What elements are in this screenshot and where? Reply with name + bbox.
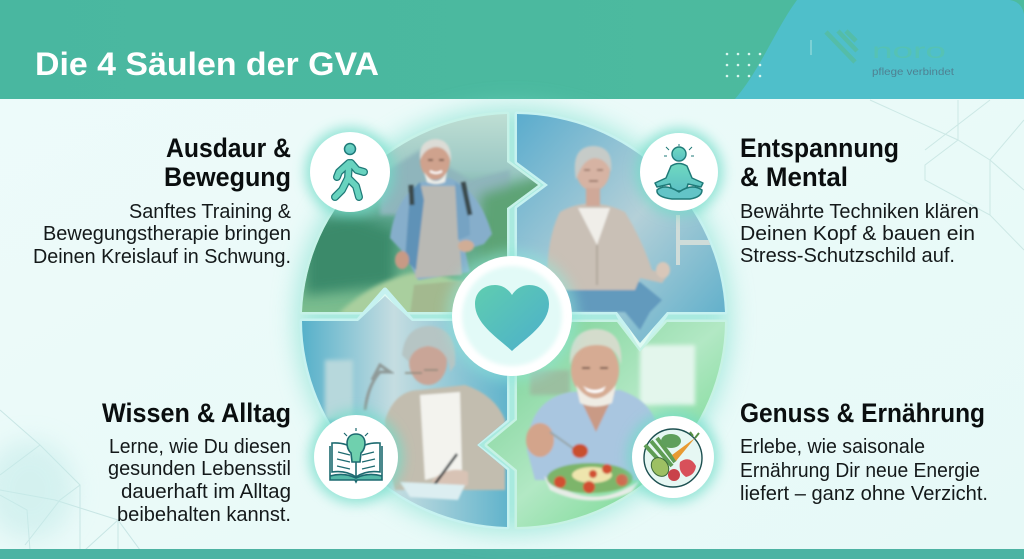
walking man xyxy=(390,139,492,315)
text: Ausdauer: Ausdaur & xyxy=(166,133,291,163)
text: Genuss xyxy=(740,398,988,505)
meditating woman xyxy=(547,146,670,330)
header band xyxy=(0,0,1024,99)
text: Wissen: Lerne, wie Du diesen xyxy=(109,435,291,458)
circle glow xyxy=(295,106,731,534)
decorative network top right xyxy=(870,100,1024,250)
text: Ausdauer: Bewegung xyxy=(164,162,291,192)
center heart badge xyxy=(446,250,578,382)
text: Wissen: dauerhaft im Alltag xyxy=(121,480,291,503)
text: Wissen: gesunden Lebensstil xyxy=(108,457,291,480)
text: Entspannung: & Mental xyxy=(740,162,848,192)
header dot grid xyxy=(726,53,761,77)
panel: Ausdauer photo xyxy=(302,112,540,314)
text: Genuss: Ernährung Dir neue Energie xyxy=(740,459,980,482)
logo xyxy=(811,31,954,78)
heart xyxy=(475,285,549,351)
salad bowl xyxy=(544,476,640,501)
bottom strip xyxy=(0,549,1024,559)
man eating xyxy=(526,329,657,501)
text: Entspannung: Deinen Kopf & bauen ein xyxy=(740,222,975,245)
text: Ausdauer: Sanftes Training & xyxy=(129,200,291,223)
text: Ausdauer: Deinen Kreislauf in Schwung. xyxy=(33,245,291,268)
writing woman xyxy=(385,326,505,500)
text: Wissen: beibehalten kannst. xyxy=(117,503,291,526)
text: Entspannung: Entspannung xyxy=(740,133,899,163)
logo: pflege verbindet xyxy=(872,66,954,78)
decorative network bottom left xyxy=(0,410,140,550)
title: Die 4 Säulen der GVA xyxy=(35,46,379,82)
text: Wissen: Wissen & Alltag xyxy=(102,398,291,428)
text: Entspannung xyxy=(740,133,979,267)
header right blob xyxy=(735,0,1024,99)
logo: noro xyxy=(872,40,946,63)
panel: Entspannung photo xyxy=(515,110,730,355)
icon: meditation xyxy=(635,128,723,216)
text: Genuss: liefert – ganz ohne Verzicht. xyxy=(740,482,988,505)
blurred lamp xyxy=(365,365,390,410)
text: Genuss: Genuss & Ernährung xyxy=(740,398,985,428)
panel: Genuss photo xyxy=(480,318,730,533)
text: Ausdauer xyxy=(33,133,291,268)
forest xyxy=(305,215,395,295)
soft glow bottom left xyxy=(0,440,75,540)
path and grass xyxy=(339,270,458,312)
shelf xyxy=(676,215,712,265)
text: Entspannung: Stress-Schutzschild auf. xyxy=(740,244,955,267)
icon: walking person xyxy=(305,127,395,217)
text: Entspannung: Bewährte Techniken klären xyxy=(740,200,979,223)
icon: food plate xyxy=(627,411,719,503)
kitchen background xyxy=(640,345,695,405)
text: Genuss: Erlebe, wie saisonale xyxy=(740,435,925,458)
icon: book with light bulb xyxy=(309,410,403,504)
mountains xyxy=(380,150,510,215)
text: Ausdauer: Bewegungstherapie bringen xyxy=(43,222,291,245)
panel: Wissen photo xyxy=(295,285,515,530)
text: Wissen xyxy=(102,398,291,526)
